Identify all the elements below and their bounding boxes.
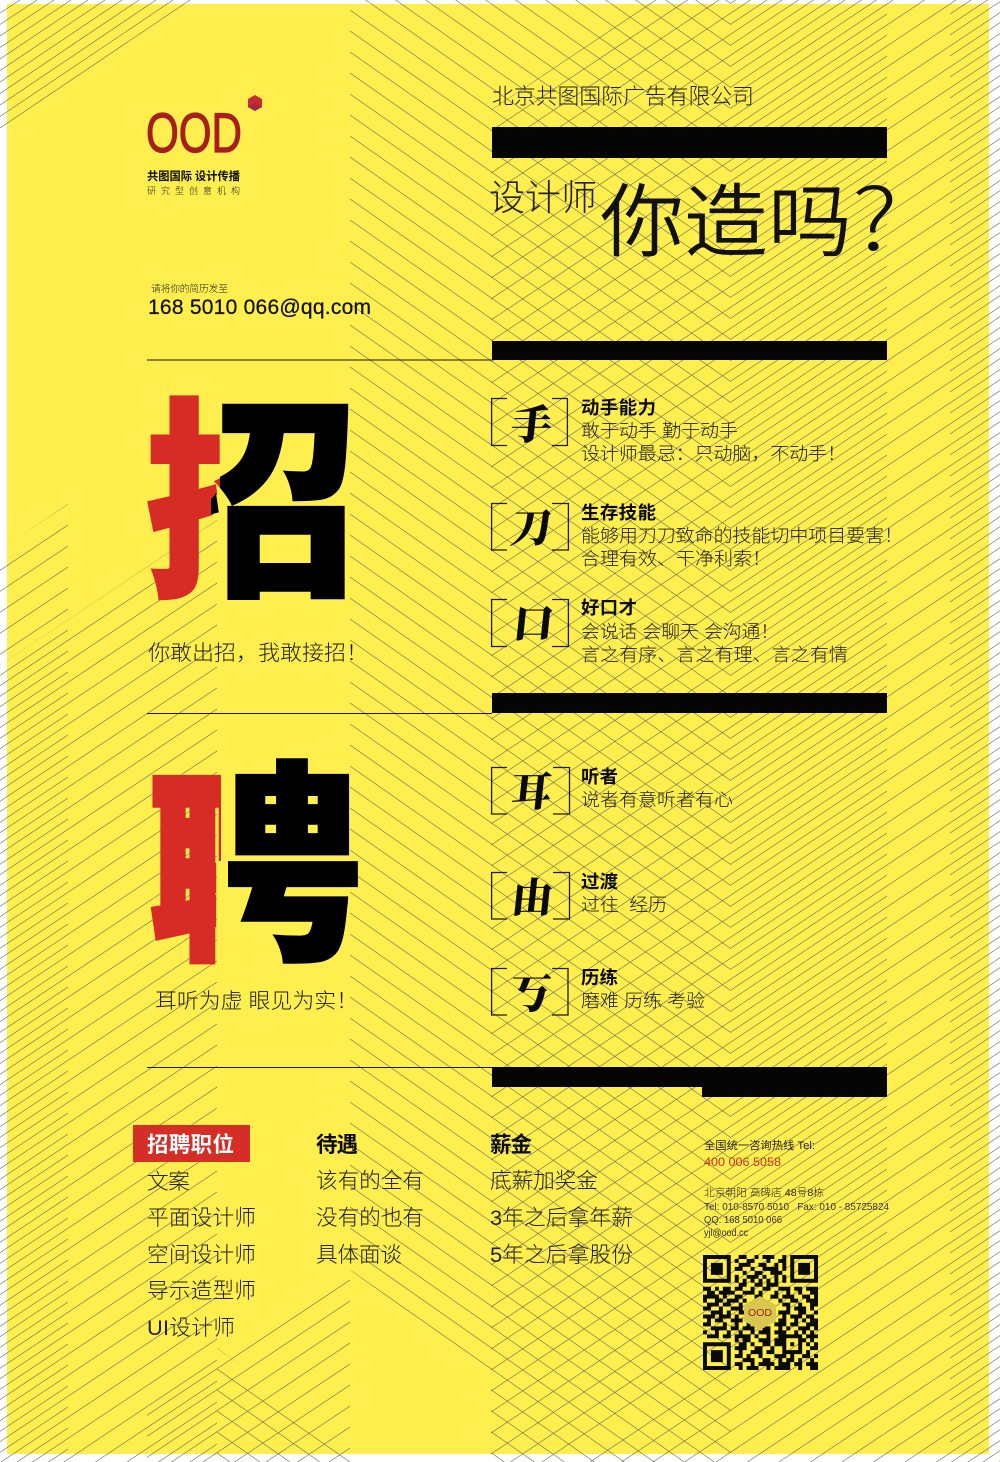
salary item: 5年之后拿股份 xyxy=(490,1242,633,1267)
divider bar 4 xyxy=(492,1067,887,1097)
logo: OOD xyxy=(146,95,262,196)
skill text: 磨难 历练 考验 xyxy=(581,990,705,1011)
company name: 北京共图国际广告有限公司 xyxy=(492,84,754,109)
resume email block xyxy=(148,282,371,319)
bracket xyxy=(492,398,567,446)
salary item: 3年之后拿年薪 xyxy=(490,1205,633,1230)
skill: 手 xyxy=(492,392,846,464)
skill text: 会说话 会聊天 会沟通！ xyxy=(581,621,779,642)
position: 空间设计师 xyxy=(147,1242,256,1267)
divider bar 3 xyxy=(492,693,887,713)
skill: 耳 xyxy=(492,759,733,818)
skill text: 合理有效、干净利索！ xyxy=(581,548,771,569)
skill: 丂 xyxy=(492,961,705,1020)
phone and fax: Tel: 010-8570 5010 Fax: 010 - 85725824 xyxy=(704,1201,889,1213)
position: 文案 xyxy=(147,1169,190,1194)
headline main: 你造吗 xyxy=(600,158,852,274)
bracket xyxy=(492,872,570,919)
divider bar 2 xyxy=(492,341,887,360)
contact block xyxy=(704,1138,889,1239)
brush glyph: 由 xyxy=(509,865,556,924)
skill title: 生存技能 xyxy=(581,502,656,523)
headline question mark: ? xyxy=(852,150,898,275)
brush glyph: 手 xyxy=(508,392,555,451)
skill text: 能够用刀刀致命的技能切中项目要害！ xyxy=(581,525,903,546)
brush glyph: 丂 xyxy=(507,961,554,1020)
benefit: 没有的也有 xyxy=(316,1205,424,1230)
bracket xyxy=(492,600,568,646)
skill title: 动手能力 xyxy=(581,397,656,418)
QR centre logo: OOD xyxy=(748,1307,772,1319)
slogan: 聘: 耳听为虚 眼见为实！ xyxy=(155,990,358,1013)
email address: 168 5010 066@qq.com xyxy=(148,296,371,319)
logo wordmark: OOD xyxy=(146,101,242,164)
heading badge: 招聘职位 xyxy=(147,1132,234,1157)
salary item: 底薪加奖金 xyxy=(490,1168,598,1193)
heading badge xyxy=(133,1125,250,1162)
skill text: 设计师最忌：只动脑，不动手！ xyxy=(581,443,846,464)
skill title: 听者 xyxy=(581,766,618,787)
bracket xyxy=(492,768,570,814)
headline prefix: 设计师 xyxy=(489,177,597,218)
skill title: 历练 xyxy=(581,967,618,988)
benefit: 具体面谈 xyxy=(316,1242,402,1267)
skill text: 言之有序、言之有理、言之有情 xyxy=(581,644,848,665)
icon: red cube xyxy=(248,95,262,111)
skill: 口 xyxy=(492,591,848,665)
skill: 由 xyxy=(492,865,667,924)
bracket xyxy=(492,968,568,1015)
big character: 招: 招 xyxy=(135,383,359,625)
column: benefits xyxy=(316,1133,424,1267)
position: UI设计师 xyxy=(147,1315,235,1340)
skill text: 敢于动手 勤于动手 xyxy=(581,420,738,441)
bracket xyxy=(492,504,568,550)
skill text: 过往 经历 xyxy=(581,894,667,915)
resume prompt: 请将你的简历发至 xyxy=(151,282,228,295)
big character: 聘: 聘 xyxy=(151,763,308,986)
benefit: 该有的全有 xyxy=(316,1168,424,1193)
skill title: 过渡 xyxy=(581,871,619,892)
skill text: 说者有意听者有心 xyxy=(581,789,733,810)
brush glyph: 口 xyxy=(510,591,557,650)
heading: 薪金 xyxy=(490,1132,532,1157)
slogan: 招: 你敢出招，我敢接招！ xyxy=(148,642,368,665)
column: positions xyxy=(133,1125,256,1340)
hotline label: 全国统一咨询热线 Tel: xyxy=(704,1138,815,1152)
logo tagline: 共图国际 设计传播 xyxy=(147,169,240,183)
QR code xyxy=(703,1257,818,1368)
big character: 聘: 聘 xyxy=(132,749,363,990)
skill: 刀 xyxy=(492,495,903,569)
logo subline: 研究型创意机构 xyxy=(147,185,240,196)
brush glyph: 刀 xyxy=(508,495,555,554)
top black bar xyxy=(492,127,887,158)
qq: QQ: 168 5010 066 xyxy=(704,1214,782,1226)
address: 北京朝阳 高碑店 48号8栋 xyxy=(704,1186,825,1199)
skill title: 好口才 xyxy=(581,597,637,618)
position: 平面设计师 xyxy=(147,1205,256,1230)
web: yjl@ood.cc xyxy=(704,1227,748,1239)
headline xyxy=(489,150,898,275)
column: salary xyxy=(490,1132,633,1267)
position: 导示造型师 xyxy=(147,1278,256,1303)
brush glyph: 耳 xyxy=(508,759,555,818)
hotline number: 400 006 5058 xyxy=(704,1155,781,1169)
heading: 待遇 xyxy=(316,1133,358,1157)
big character: 招: 招 xyxy=(144,386,345,626)
